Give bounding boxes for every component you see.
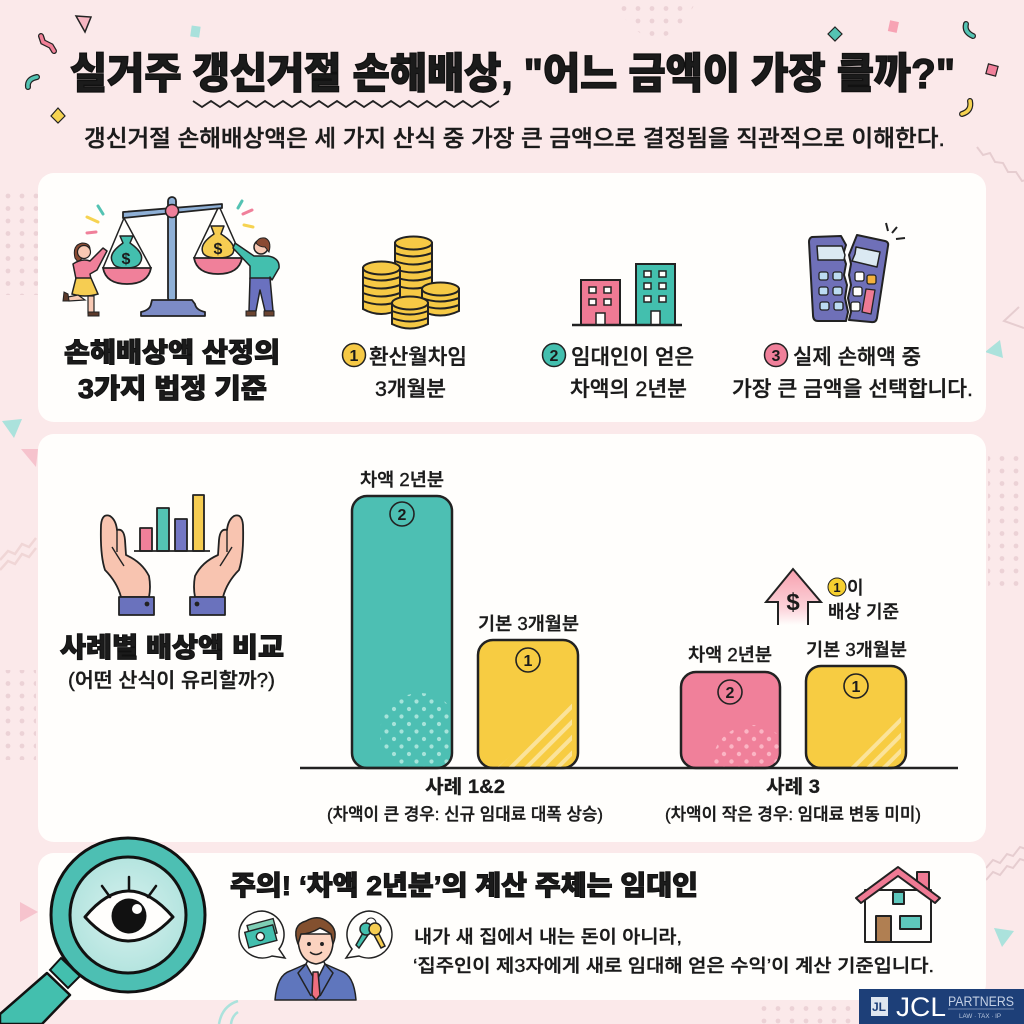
criterion 2: 차액의 2년분 bbox=[570, 378, 687, 401]
bar: case 1&2 difference bbox=[352, 470, 460, 773]
bar: case 1&2 difference: 차액 2년분 bbox=[360, 470, 444, 490]
bar: case 3 base bbox=[806, 640, 907, 768]
subtitle: 갱신거절 손해배상액은 세 가지 산식 중 가장 큰 금액으로 결정됨을 직관적으로 이해한다. bbox=[84, 125, 945, 151]
subheading: (어떤 산식이 유리할까?) bbox=[68, 669, 275, 692]
callout: basis: 이 bbox=[847, 578, 864, 598]
icon: balance scale with people: $ bbox=[122, 251, 131, 268]
bar: case 1&2 base: 1 bbox=[524, 653, 533, 670]
title underline squiggle bbox=[193, 101, 499, 107]
case 3 caption: (차액이 작은 경우: 임대료 변동 미미) bbox=[665, 805, 921, 824]
icon: balance scale with people: $ bbox=[214, 241, 223, 258]
callout: basis: 배상 기준 bbox=[828, 602, 899, 622]
chart axis bbox=[300, 767, 958, 769]
case 1&2 caption bbox=[327, 776, 603, 824]
bar: case 3 difference: 차액 2년분 bbox=[688, 645, 772, 665]
heading: caution: 주의! ‘차액 2년분’의 계산 주체는 임대인 bbox=[230, 871, 698, 901]
criterion 1: 환산월차임 bbox=[369, 346, 467, 369]
title: 실거주 갱신거절 손해배상, "어느 금액이 가장 클까?" bbox=[70, 50, 955, 97]
bar: case 3 difference bbox=[680, 645, 782, 770]
body text: ‘집주인이 제3자에게 새로 임대해 얻은 수익’이 계산 기준입니다. bbox=[413, 956, 934, 976]
criterion 3 bbox=[732, 344, 973, 401]
heading: legal criteria bbox=[64, 338, 280, 404]
heading: legal criteria: 3가지 법정 기준 bbox=[78, 374, 267, 404]
bar: case 1&2 difference: 2 bbox=[398, 507, 407, 524]
bar: case 3 base: 기본 3개월분 bbox=[806, 640, 907, 660]
criterion 3: 실제 손해액 중 bbox=[793, 346, 921, 369]
man figure bbox=[233, 238, 279, 316]
bar: case 3 difference: 2 bbox=[726, 685, 735, 702]
case 3 caption bbox=[665, 776, 921, 824]
criterion 2: 2 bbox=[550, 348, 559, 365]
case 3 caption: 사례 3 bbox=[766, 776, 820, 798]
heading: legal criteria: 손해배상액 산정의 bbox=[64, 338, 280, 368]
icon: house bbox=[856, 867, 940, 942]
bar: case 3 base: 1 bbox=[852, 679, 861, 696]
criterion 1: 1 bbox=[350, 348, 359, 365]
panel: case comparison bbox=[38, 434, 986, 842]
bar: case 1&2 base bbox=[478, 614, 579, 768]
callout: basis bbox=[828, 578, 899, 622]
bar: case 1&2 base: 기본 3개월분 bbox=[478, 614, 579, 634]
heading: case comparison: 사례별 배상액 비교 bbox=[60, 633, 284, 663]
bar chart bbox=[300, 470, 958, 770]
criterion 3: 가장 큰 금액을 선택합니다. bbox=[732, 378, 973, 401]
callout: basis: 1 bbox=[833, 580, 841, 595]
icon: keys bubble bbox=[346, 911, 392, 958]
panel: caution bbox=[38, 853, 986, 1000]
criterion 2: 임대인이 얻은 bbox=[571, 346, 694, 369]
icon: coin stacks bbox=[363, 236, 459, 328]
icon: buildings bbox=[572, 264, 682, 325]
icon: money bubble bbox=[239, 911, 285, 958]
icon: balance scale with people bbox=[63, 197, 279, 316]
case 1&2 caption: (차액이 큰 경우: 신규 임대료 대폭 상승) bbox=[327, 805, 603, 824]
woman figure bbox=[63, 243, 107, 316]
icon: up arrow with dollar: $ bbox=[786, 589, 800, 616]
criterion 2 bbox=[542, 344, 694, 401]
logo: JCL Partners: PARTNERS bbox=[948, 994, 1014, 1009]
logo: JCL Partners: LAW · TAX · IP bbox=[959, 1014, 1001, 1020]
panel: three legal criteria bbox=[38, 173, 986, 422]
case 1&2 caption: 사례 1&2 bbox=[425, 776, 505, 798]
body text: 내가 새 집에서 내는 돈이 아니라, bbox=[414, 927, 682, 947]
icon: magnifying glass with eye bbox=[0, 838, 205, 1024]
criterion 3: 3 bbox=[772, 348, 781, 365]
icon: hands holding bar chart bbox=[101, 495, 243, 615]
criterion 1: 3개월분 bbox=[375, 378, 446, 401]
icon: person bbox=[275, 918, 356, 1000]
logo: JCL Partners: JCL bbox=[896, 992, 946, 1022]
logo: JCL Partners: JL bbox=[872, 1000, 886, 1014]
icon: broken calculator bbox=[809, 223, 905, 322]
logo: JCL Partners bbox=[859, 989, 1024, 1024]
body text bbox=[413, 927, 934, 976]
confetti bbox=[28, 16, 998, 123]
icon: up arrow with dollar bbox=[766, 569, 821, 625]
criterion 1 bbox=[342, 344, 467, 401]
